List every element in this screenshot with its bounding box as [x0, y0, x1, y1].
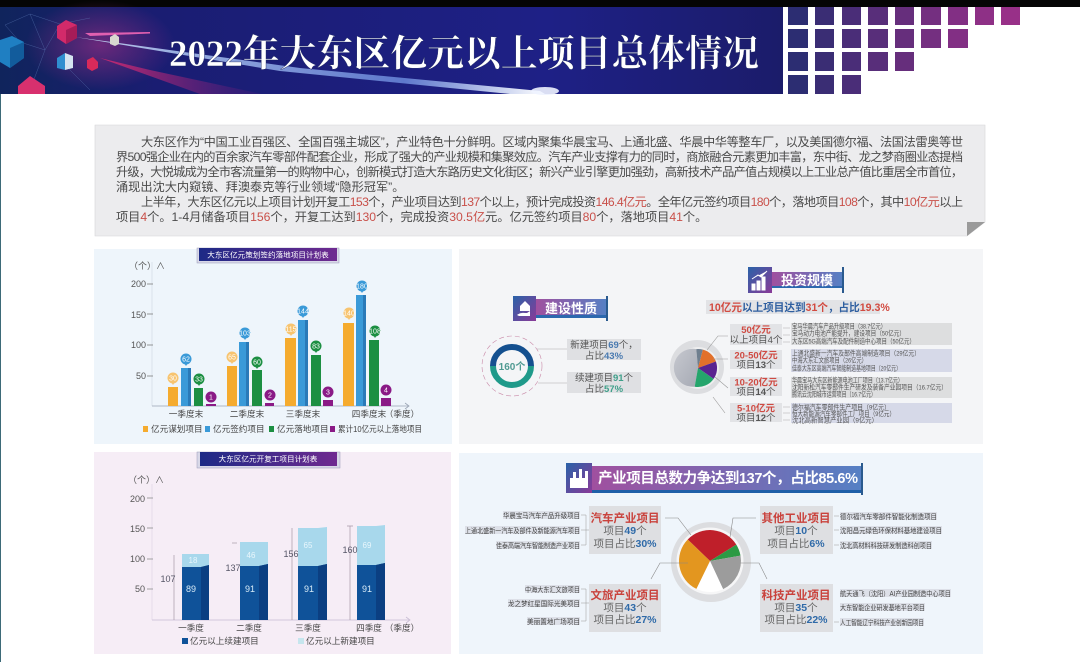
callout: automotive projects: [589, 506, 661, 554]
bar chart: blue signed projects: 144: [297, 308, 309, 316]
header banner: [0, 0, 783, 95]
heading: industrial project total: [566, 463, 863, 495]
chart axes: [129, 261, 419, 419]
chart axes: 一季度末: [169, 408, 204, 419]
chart axes: 100: [131, 340, 146, 350]
tier: 2 to 5 billion: [730, 348, 952, 372]
chart legend: [143, 423, 422, 434]
icon: rising bars: [748, 267, 772, 293]
stacked bar: quarter two: 91: [245, 584, 255, 594]
chart axes: （季度）: [385, 408, 419, 419]
bar chart: blue signed projects: 62: [182, 356, 190, 364]
chart axes: 四季度: [356, 622, 382, 633]
stacked bar: quarter three: 91: [304, 584, 314, 594]
stacked bar: quarter two: 137: [225, 563, 241, 573]
chart axes: 三季度: [295, 622, 321, 633]
pie chart: investment scale: [670, 340, 724, 394]
tier: 1 to 2 billion: 腾讯云沈阳城市运营项目（16.7亿元）: [792, 390, 876, 398]
bar chart: orange planned projects: 140: [343, 310, 355, 318]
chart axes: 四季度末: [352, 408, 387, 419]
tier: 500 million to 1 billion: [730, 402, 952, 424]
tier: 5 billion and above: 宝马华晨汽车产品升级项目（38.7亿元）: [792, 322, 886, 330]
text block: intro paragraphs: [116, 134, 963, 224]
chart axes: 50: [136, 371, 146, 381]
chart axes: 三季度末: [286, 408, 321, 419]
bar chart: orange planned projects: [168, 308, 355, 406]
callout: culture and tourism projects: [589, 584, 661, 632]
stacked bar: quarter three: [283, 527, 327, 620]
list: other industrial project names: [834, 512, 942, 550]
decorative square grid: [788, 7, 1020, 94]
tier: 500 million to 1 billion: 项目12个: [736, 413, 776, 424]
chart legend: 亿元以上新建项目: [306, 635, 375, 646]
chart axes: 50: [135, 584, 145, 594]
bar chart: green landed projects: 33: [195, 376, 203, 384]
icon: decorative cubes: [0, 20, 119, 94]
chart axes: 150: [130, 524, 145, 534]
text block: intro paragraphs: 升级，大悦城成为全市客流量第一的购物中心，创新模式打造大东路历史文化街区；新兴产业引擎更加强劲，高新技术产品产值占规模以上工业总产值比重居全市首位，: [116, 164, 963, 179]
chart heading: [197, 248, 339, 263]
stacked bar: quarter four: 69: [363, 541, 372, 550]
chart heading: 大东区亿元策划签约落地项目计划表: [207, 250, 329, 260]
tier: 1 to 2 billion: 沈阳新松汽车零部件生产研发及装备产业园项目（16.7亿元）: [792, 382, 947, 392]
chart axes: [128, 475, 419, 633]
tier: 5 billion and above: 宝马动力电池产能提升，建设项目（50亿元）: [792, 328, 905, 338]
tier: 5 billion and above: 以上项目4个: [730, 335, 783, 346]
bar chart: green landed projects: 108: [369, 328, 381, 336]
list: technology project names: 大东智能企业研发基地平台项目: [840, 603, 925, 612]
donut chart: 160 projects: 160个: [499, 361, 525, 373]
panel: industrial projects: [459, 453, 983, 654]
callout: other industrial projects: [760, 506, 833, 554]
stacked bar: quarter four: 160: [342, 545, 358, 555]
callout: new projects: 占比43%: [585, 350, 624, 362]
list: technology project names: 人工智能辽宁科技产业创新园项目: [840, 618, 924, 627]
list: technology project names: [834, 589, 951, 627]
leader lines: [707, 336, 728, 413]
bar chart: purple projects over 1 billion: 2: [268, 392, 272, 400]
list: automotive project names: [465, 511, 589, 550]
text block: intro paragraphs: 涌现出沈大内窥镜、拜澳泰克等行业领域“隐形冠军”。: [116, 179, 404, 194]
callout: other industrial projects: 其他工业项目: [762, 511, 830, 525]
chart legend: 亿元以上续建项目: [190, 635, 259, 646]
callout: culture and tourism projects: 项目占比27%: [593, 613, 657, 626]
callout: over 1 billion summary: 10亿元以上项目达到31个，占比19.3%: [709, 301, 890, 314]
tier: 2 to 5 billion: 上通北盛新一汽车及部件高端制造项目（29亿元）: [792, 348, 920, 358]
callout: other industrial projects: 项目占比6%: [767, 537, 825, 550]
list: culture and tourism project names: [508, 585, 589, 626]
callout: culture and tourism projects: 项目43个: [603, 602, 647, 614]
stacked bar: quarter three: 156: [283, 549, 299, 559]
tier: 1 to 2 billion: 10-20亿元: [734, 376, 778, 388]
tier: 5 billion and above: [730, 322, 952, 346]
tier: 5 billion and above: 大东区5G高端汽车及配件制造中心项目（50亿元）: [792, 336, 915, 346]
chart legend: 累计10亿元以上落地项目: [338, 423, 422, 434]
heading: construction type: [513, 296, 608, 321]
chart heading: 大东区亿元开复工项目计划表: [219, 454, 318, 464]
callout: continuing projects: 续建项目91个: [575, 372, 634, 384]
chart axes: 200: [131, 279, 146, 289]
chart legend: [182, 635, 375, 646]
bar chart: green landed projects: 83: [312, 344, 320, 350]
chart axes: 一季度: [178, 622, 204, 633]
bar chart: purple projects over 1 billion: 4: [384, 388, 388, 394]
text block: intro paragraphs: 项目4个。1-4月储备项目156个，开复工达到130个，完成投资30.5亿元。亿元签约项目80个，落地项目41个。: [116, 209, 707, 224]
icon: factory: [566, 463, 592, 493]
callout: continuing projects: [538, 372, 641, 395]
tier: 2 to 5 billion: 项目13个: [736, 360, 776, 371]
heading: construction type: 建设性质: [545, 301, 597, 316]
tier: 500 million to 1 billion: 恒大新能源汽车零部件工厂项目（9亿元）: [792, 409, 895, 418]
tier: 2 to 5 billion: 20-50亿元: [734, 350, 778, 362]
list: other industrial project names: 沈北高材料科技研发制造科创项目: [840, 541, 932, 550]
pie chart: industrial projects: [671, 522, 751, 602]
callout: culture and tourism projects: 文旅产业项目: [590, 588, 660, 602]
heading: investment scale: 投资规模: [781, 273, 833, 288]
stacked bar: quarter two: 46: [247, 551, 256, 560]
bar chart: orange planned projects: 65: [228, 354, 236, 362]
panel: signed and landed project chart: [94, 248, 452, 444]
bar chart: blue signed projects: [180, 280, 368, 406]
callout: technology projects: 项目35个: [774, 602, 818, 614]
callout: automotive projects: 汽车产业项目: [590, 511, 660, 525]
list: technology project names: 航天通飞（沈阳）AI产业园制造中心项目: [840, 589, 951, 598]
chart axes: 150: [131, 310, 146, 320]
bar chart: purple projects over 1 billion: 1: [209, 394, 213, 402]
text block: intro paragraphs: 上半年，大东区亿元以上项目计划开复工153个，产业项目达到137个以上，预计完成投资146.4亿元。全年亿元签约项目180个，落地项目108个，其中10亿元以上: [141, 194, 963, 209]
chart axes: 二季度: [236, 622, 262, 633]
chart axes: 200: [130, 494, 145, 504]
callout: continuing projects: 占比57%: [585, 383, 624, 395]
callout: new projects: 新建项目69个，: [570, 339, 638, 351]
stacked bar: quarter four: 91: [362, 584, 372, 594]
stacked bar: quarter four: [342, 525, 385, 620]
heading: investment scale: [748, 267, 844, 293]
leader lines: [651, 518, 767, 579]
chart axes: （季度）: [385, 622, 419, 633]
text block: intro paragraphs: 大东区作为“中国工业百强区、全国百强主城区”，产业特色十分鲜明。区域内聚集华晨宝马、上通北盛、华晨中华等整车厂，以及美国德尔福、法国法雷奥等世: [141, 134, 963, 149]
stacked bar: quarter one: 107: [160, 574, 176, 584]
bar chart: blue signed projects: 103: [239, 330, 251, 338]
tier: 1 to 2 billion: 项目14个: [736, 387, 776, 398]
panel: resumed work project chart: [94, 452, 451, 654]
donut chart: 160 projects: [482, 336, 542, 396]
bar chart: orange planned projects: 30: [169, 376, 177, 382]
chart legend: 亿元落地项目: [277, 423, 329, 434]
tier: 2 to 5 billion: 中海大东汇文旅项目（26亿元）: [792, 356, 867, 364]
list: culture and tourism project names: 美丽置地广场项目: [527, 617, 580, 626]
list: other industrial project names: 沈阳昌元绿色环保材料基地建设项目: [840, 526, 942, 535]
stacked bar: quarter two: [225, 542, 268, 620]
list: automotive project names: 华晨宝马汽车产品升级项目: [503, 511, 580, 520]
chart heading: [197, 452, 340, 468]
stacked bar: quarter one: 89: [186, 584, 196, 594]
stacked bar: quarter three: 65: [304, 541, 313, 550]
callout: technology projects: 项目占比22%: [764, 613, 828, 626]
callout: automotive projects: 项目占比30%: [593, 537, 657, 550]
bar chart: green landed projects: 60: [253, 360, 261, 366]
list: culture and tourism project names: 中海大东汇文旅项目: [525, 585, 580, 594]
callout: new projects: [537, 339, 641, 362]
text block: intro paragraphs: 界500强企业在内的百余家汽车零部件配套企业，形成了强大的产业规模和集聚效应。汽车产业支撑有力的同时，商旅融合元素更加丰富，东中街、龙之梦商圈业态提档: [116, 149, 963, 164]
tier: 500 million to 1 billion: 5-10亿元: [737, 402, 776, 414]
chart axes: 二季度末: [230, 408, 265, 419]
list: culture and tourism project names: 龙之梦红星国际光美项目: [508, 599, 580, 608]
callout: technology projects: 科技产业项目: [762, 588, 830, 602]
heading: industrial project total: 产业项目总数力争达到137个，占比85.6%: [598, 469, 858, 487]
stacked bar: quarter one: [160, 554, 209, 620]
chart axes: （个）∧: [129, 261, 165, 271]
chart legend: 亿元签约项目: [213, 423, 265, 434]
tier: 2 to 5 billion: 佳泰大东区高端汽车智能制造基地项目（20亿元）: [792, 364, 901, 372]
bar chart: blue signed projects: 180: [356, 284, 368, 290]
list: automotive project names: 上通北盛新一汽车及部件及新能源汽车项目: [465, 526, 580, 535]
icon: house in hand: [513, 296, 536, 321]
chart legend: 亿元谋划项目: [151, 423, 203, 434]
tier: 500 million to 1 billion: 沈北高新智慧产业园（9亿元）: [792, 416, 878, 424]
panel: intro text: [95, 125, 985, 236]
tier: 5 billion and above: 50亿元: [741, 324, 771, 336]
bar chart: green landed projects: [194, 326, 381, 406]
bar chart: orange planned projects: 115: [285, 326, 297, 334]
tier: 1 to 2 billion: [730, 376, 952, 398]
panel: construction and investment: [459, 249, 983, 444]
chart axes: 100: [130, 554, 145, 564]
chart axes: （个）∧: [128, 475, 164, 485]
list: other industrial project names: 德尔福汽车零部件智能化制造项目: [840, 512, 937, 521]
bar chart: purple projects over 1 billion: 3: [326, 390, 330, 396]
tier: 1 to 2 billion: 华晨宝马大东区新能源电池工厂项目（13.7亿元）: [792, 376, 903, 384]
stacked bar: quarter one: 18: [189, 556, 198, 565]
list: automotive project names: 佳泰高端汽车智能制造产业项目: [496, 541, 580, 550]
callout: other industrial projects: 项目10个: [774, 525, 818, 537]
title: 2022年大东区亿元以上项目总体情况: [169, 33, 759, 75]
callout: technology projects: [760, 584, 833, 632]
bar chart: purple projects over 1 billion: [206, 384, 392, 406]
tier: 500 million to 1 billion: 德尔福汽车零部件生产项目（9亿元）: [792, 402, 890, 412]
callout: automotive projects: 项目49个: [603, 525, 647, 537]
